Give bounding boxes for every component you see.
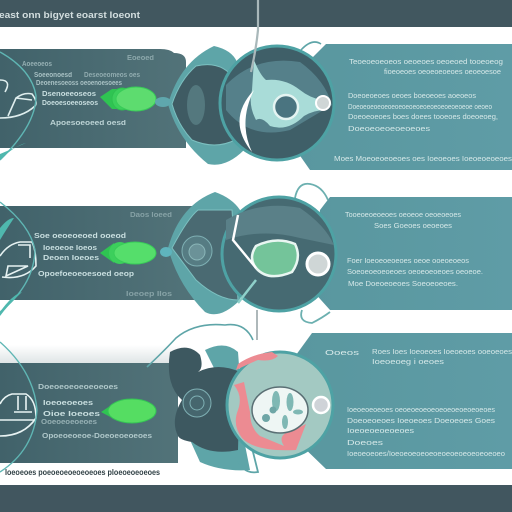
tail: row 1 loop xyxy=(301,42,321,50)
row 1 right text: Doeoeoeoes oeoes boeoeoes aoeoeos xyxy=(348,93,477,100)
pill: row 3 green xyxy=(101,399,156,423)
icon: row 3 device outline xyxy=(0,394,36,436)
tails: row 2 loops xyxy=(295,184,330,323)
row 3 left labels: Doeoeoeoeoeoeoes xyxy=(38,384,118,391)
organ: row 2 outer shape xyxy=(160,192,240,314)
row 1 right text: Doeoeoeoes boes doees tooeoes doeoeoeg, xyxy=(348,114,498,121)
diagram: row 3 circle xyxy=(227,352,333,458)
row 1 left labels: Aoeeoeos xyxy=(22,61,52,68)
pill: row 1 green xyxy=(100,87,156,111)
pill: row 2 green xyxy=(100,242,156,264)
panel: row 3 right teal xyxy=(296,333,512,469)
row 2 left labels: Ioeoep IIos xyxy=(126,291,172,298)
icon: row 2 device outline xyxy=(0,242,36,278)
row 3 right text: Ioeoeoeoes/Ioeoeoeoeoeoeoeoeoeoeoeoeoeo xyxy=(347,451,505,458)
row 1 right text: Moes Moeoeoeoeoes oes Ioeoeoes Ioeoeoeoeoes xyxy=(334,156,512,163)
row 1 right text: Doeoeoeoeoeoeoeoeoeoeoeoeoeoeoeoeoe oeoeo xyxy=(348,104,492,111)
panel: row 2 dark banner xyxy=(0,202,195,316)
row 3 right text: Doeoes xyxy=(347,440,384,447)
row 2 left labels xyxy=(34,212,172,298)
row 2 right text: Soes Goeoes oeoeoes xyxy=(374,223,453,230)
tube: lower catheter xyxy=(256,310,258,340)
organ: row 1 outer shape xyxy=(155,46,244,165)
arc row 3 xyxy=(0,342,37,472)
footer band xyxy=(0,485,512,512)
panel: row 2 right teal xyxy=(312,197,512,310)
row 3 right text: Ooeos xyxy=(325,350,360,357)
row 3 left labels: Ioeoeoeoes xyxy=(43,400,93,407)
row 3 right text: Ioeoeoeoeoeoes xyxy=(347,428,415,435)
diagram: row 2 circle xyxy=(222,197,336,311)
arc row 1 xyxy=(0,52,36,160)
caption text: Ioeoeoes poeoeoeoeoeoeoes ploeoeoeoeoes xyxy=(5,468,160,477)
panel: row 1 right teal xyxy=(296,44,512,170)
row 1 left labels: Apoesoeoeed oesd xyxy=(50,120,126,127)
row 2 left labels: Ioeoeoe Ioeos xyxy=(43,245,97,252)
row 2 left labels: Soe oeoeoeoed ooeod xyxy=(34,233,126,240)
row 3 right text: Ioeoeoeoeoes oeoeoeoeoeoeoeoeoeoeoeoes xyxy=(347,407,496,414)
row 1 left labels: Eoeoed xyxy=(127,55,154,62)
row 2 left labels: Opoefoeoeoesoed oeop xyxy=(38,271,134,278)
panel: row 1 dark banner xyxy=(0,49,186,160)
diagram: row 1 circle xyxy=(220,46,334,160)
row 1 left labels: Doeoesoeeoseos xyxy=(42,100,98,107)
row 3 right text xyxy=(325,349,512,458)
title: east onn bigyet eoarst Ioeont xyxy=(0,10,140,20)
header band xyxy=(0,0,512,27)
row 1 right text: Teoeoeoeoeos oeoeoes oeoeoed tooeoeog xyxy=(349,59,503,66)
organ: row 3 outer shape xyxy=(169,345,258,472)
arc row 2 xyxy=(0,202,35,312)
tube: central catheter xyxy=(251,0,258,72)
row 3 left labels: Opoeoeoeoe-Doeoeoeoeoes xyxy=(42,433,152,440)
row 1 left labels xyxy=(22,55,154,127)
row 3 right text: Roes Ioes Ioeoeoes Ioeoeoes ooeoeoes xyxy=(372,349,512,356)
row 3 left labels: Oioe Ioeoes xyxy=(43,411,100,418)
shadow above row 3 xyxy=(0,345,180,363)
row 3 right text: Ioeoeoeg i oeoes xyxy=(372,359,445,366)
panel: row 3 dark banner xyxy=(0,342,178,472)
row 1 left labels: Soeeonoesd xyxy=(34,72,72,79)
row 3 right text: Doeoeoeoes Ioeoeoes Doeoeoes Goes xyxy=(347,418,496,425)
row 3 left labels: Ooeoeoeoeoes xyxy=(41,419,97,426)
row 2 left labels: Daos Ioeed xyxy=(130,212,172,219)
row 1 right text: fioeoeoes oeoeoeoeoes oeoeoesoe xyxy=(384,69,501,76)
row 2 right text: Tooeoeoeoeoes oeoeoe oeoeoeoes xyxy=(345,212,462,219)
row 1 left labels: Dsenoeeoseos xyxy=(42,91,96,98)
row 1 right text xyxy=(334,59,512,163)
row 2 right text: Moe Doeoeoeoes Soeoeoeoes. xyxy=(348,281,458,288)
row 1 left labels: Deoenesoeoss oeoenoesoees xyxy=(36,80,122,87)
row 3 left labels xyxy=(38,384,152,440)
row 2 right text: Soeoeoeoeoeoes oeoeoeoeoes oeoeoe. xyxy=(347,269,483,276)
row 2 left labels: Deoen Ioeoes xyxy=(43,255,99,262)
row 1 left labels: Deseoeomeos oes xyxy=(84,72,140,79)
tail: curve above row 3 xyxy=(147,325,253,367)
icon: row 1 device outline xyxy=(0,80,36,118)
row 2 right text xyxy=(345,212,483,288)
row 2 right text: Foer Ioeoeoeoeoes oeoe ooeoeoeos xyxy=(347,258,470,265)
row 1 right text: Doeoeoeoeoeoeoes xyxy=(348,126,431,133)
